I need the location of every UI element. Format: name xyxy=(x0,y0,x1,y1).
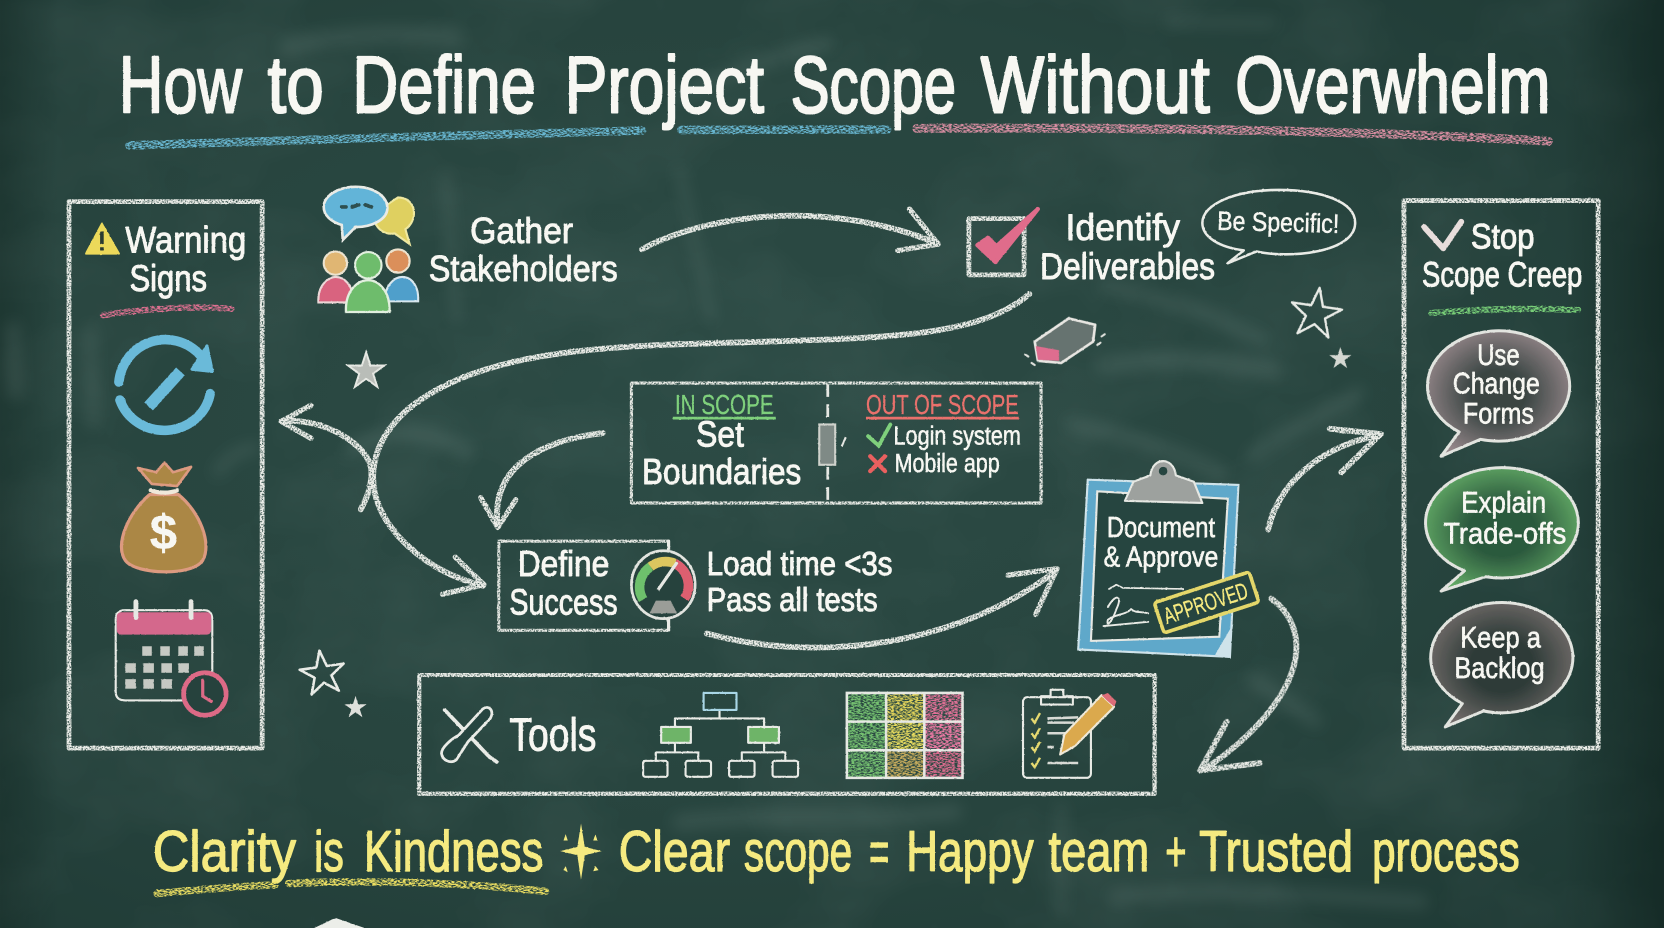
title: Scope xyxy=(791,40,956,130)
text: success metrics xyxy=(707,545,892,618)
callout: be specific: Be Specific! xyxy=(1217,206,1340,239)
panel: stop scope creep xyxy=(1404,201,1598,748)
callout: keep a backlog: Backlog xyxy=(1454,652,1545,685)
list: login system and mobile app: Mobile app xyxy=(895,450,1000,478)
arrow: deliverables to define success xyxy=(373,294,1029,594)
icon: star near left panel xyxy=(348,352,384,387)
arrow: document to stop scope creep xyxy=(1268,429,1381,530)
text: identify deliverables: Deliverables xyxy=(1040,245,1215,287)
text: set boundaries: Set xyxy=(696,414,744,455)
arrow: boundaries to define success xyxy=(481,433,603,527)
callout: keep a backlog: Keep a xyxy=(1460,621,1541,654)
callout: use change forms: Forms xyxy=(1463,397,1534,430)
title xyxy=(119,40,1550,145)
text: identify deliverables: Identify xyxy=(1065,206,1180,248)
icon: chalk stick xyxy=(819,424,846,465)
panel: define success: Success xyxy=(509,581,618,622)
panel: warning signs xyxy=(69,202,262,748)
footer: clear scope message: team xyxy=(1048,820,1149,884)
heading: stop scope creep xyxy=(1422,217,1582,313)
title: Overwhelm xyxy=(1235,40,1550,130)
callout: explain trade-offs xyxy=(1426,468,1578,591)
icon: org chart xyxy=(643,693,798,777)
arrow: gather to deliverables xyxy=(642,209,938,250)
callout: use change forms xyxy=(1428,331,1570,456)
footer: clear scope message: Clear xyxy=(619,820,730,884)
footer: clear scope message xyxy=(619,820,1520,884)
text: out of scope: OUT OF SCOPE xyxy=(866,389,1019,420)
text: document and approve xyxy=(1104,512,1218,574)
text: gather stakeholders: Stakeholders xyxy=(429,248,618,289)
text: set boundaries: Boundaries xyxy=(642,451,801,492)
heading: warning signs: Signs xyxy=(130,257,207,299)
icon: eraser xyxy=(1025,318,1105,365)
text: set boundaries xyxy=(642,414,801,492)
signature xyxy=(1104,585,1183,626)
footer: clear scope message: + xyxy=(1165,820,1186,884)
heading: tools: Tools xyxy=(509,708,596,760)
callout: keep a backlog xyxy=(1431,602,1573,727)
icon: gauge xyxy=(631,551,695,619)
icon: money bag: $ xyxy=(150,507,177,561)
footer: clear scope message: process xyxy=(1372,820,1520,884)
panel: define success xyxy=(499,541,669,630)
panel: set boundaries scope box xyxy=(631,383,1041,503)
heading: warning signs: Warning xyxy=(125,219,246,261)
footer: clarity is kindness: is xyxy=(314,820,344,884)
icon: outlined star upper right xyxy=(1288,284,1345,339)
panel: define success: Define xyxy=(518,543,609,584)
panel: tools xyxy=(419,675,1155,794)
footer: clear scope message: = xyxy=(869,820,889,884)
text: document and approve: Document xyxy=(1107,512,1215,544)
icon: check mark xyxy=(1424,222,1461,248)
chalk piece at bottom edge xyxy=(313,918,366,928)
title: How xyxy=(119,40,243,130)
icon: pink check box xyxy=(969,209,1038,275)
list: login system and mobile app xyxy=(868,423,1021,478)
title: Define xyxy=(352,40,536,130)
footer: clarity is kindness: Clarity xyxy=(153,820,296,884)
icon: small star lower left xyxy=(344,696,367,717)
stamp: approved: APPROVED xyxy=(1160,577,1251,629)
text: in scope: IN SCOPE xyxy=(675,389,774,420)
icon: calendar with clock xyxy=(116,602,226,715)
title: Without xyxy=(981,40,1210,130)
footer: clarity is kindness xyxy=(153,820,545,894)
text: success metrics: Load time <3s xyxy=(707,545,892,582)
title: to xyxy=(267,40,324,130)
footer: clear scope message: scope xyxy=(744,820,852,884)
arrow: document to tools xyxy=(1200,599,1296,770)
icon: money bag xyxy=(121,463,206,572)
heading: warning signs xyxy=(103,219,246,315)
footer: clarity is kindness: Kindness xyxy=(364,820,543,884)
text: gather stakeholders: Gather xyxy=(470,210,573,251)
arrow: success to document xyxy=(707,569,1057,648)
icon: cycle with slash xyxy=(119,340,212,430)
title: Project xyxy=(565,40,764,130)
callout: explain trade-offs: Explain xyxy=(1461,487,1546,520)
text: success metrics: Pass all tests xyxy=(707,581,878,618)
callout: be specific xyxy=(1202,190,1355,263)
footer: clear scope message: Happy xyxy=(906,820,1034,884)
callout: explain trade-offs: Trade-offs xyxy=(1443,517,1566,550)
icon: crossed tools xyxy=(441,708,497,762)
footer: clear scope message: Trusted xyxy=(1199,820,1353,884)
list: login system and mobile app: Login system xyxy=(894,423,1021,451)
icon: document and approve clipboard xyxy=(1078,461,1259,658)
icon: outlined star lower left xyxy=(297,648,347,696)
heading: stop scope creep: Stop xyxy=(1471,217,1534,256)
callout: use change forms: Use xyxy=(1477,339,1520,372)
text: gather stakeholders xyxy=(429,210,618,289)
icon: warning triangle xyxy=(86,224,119,254)
icon: checklist with pencil xyxy=(1023,690,1116,778)
text: document and approve: & Approve xyxy=(1104,542,1218,574)
stamp: approved xyxy=(1154,572,1259,633)
arrow: back to warning signs xyxy=(281,405,371,509)
heading: stop scope creep: Scope Creep xyxy=(1422,256,1582,295)
text: identify deliverables xyxy=(1040,206,1215,287)
icon: stakeholders with speech bubbles xyxy=(318,187,418,312)
icon: small star upper right xyxy=(1329,347,1351,368)
callout: use change forms: Change xyxy=(1453,368,1540,401)
chart: colour grid xyxy=(847,693,963,778)
icon: sparkle xyxy=(560,823,602,880)
